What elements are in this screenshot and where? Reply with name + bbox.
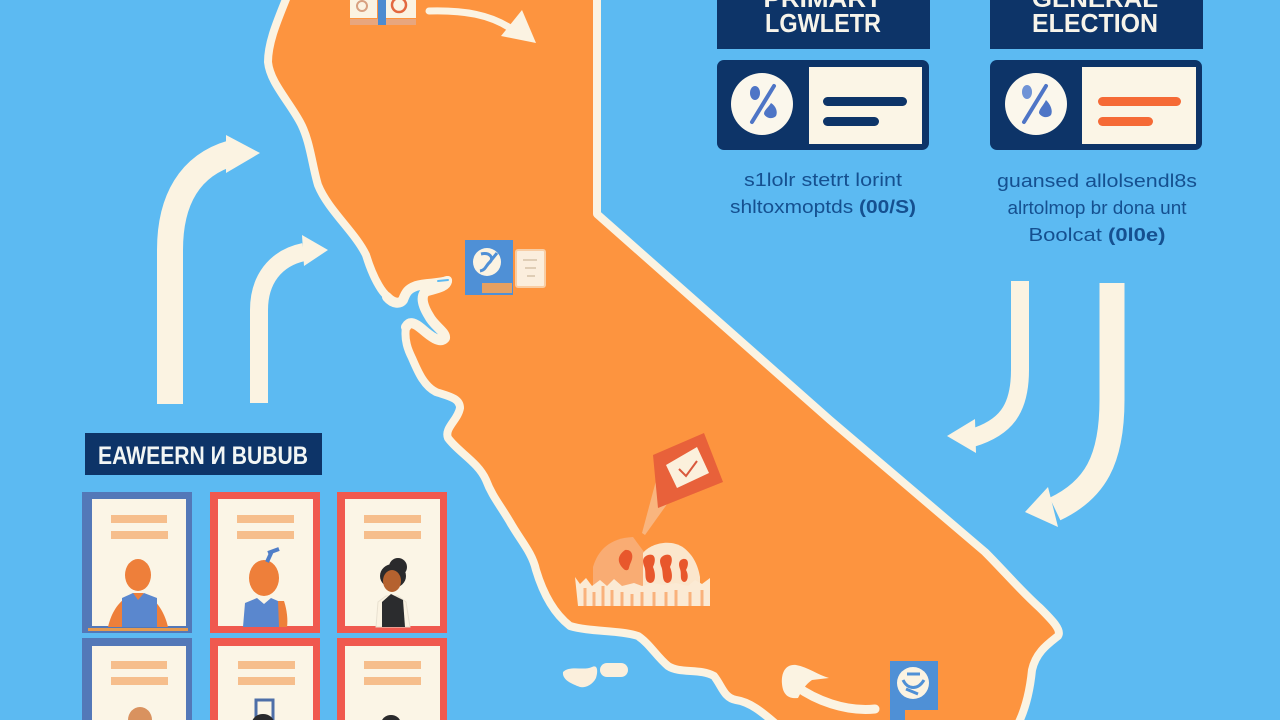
- icon: southern globe badge: [890, 661, 938, 720]
- panel: primary election column: [717, 0, 930, 217]
- arrow: southern map: [782, 665, 875, 709]
- arrow: large left up: [170, 135, 260, 404]
- card: red frame top middle: [210, 492, 320, 633]
- card: primary stats: [717, 60, 929, 150]
- arrow: right small down-left: [947, 281, 1020, 453]
- text: general description: [997, 171, 1197, 245]
- text: general description: guansed allolsendl8s: [997, 171, 1197, 191]
- arrow: top map: [429, 10, 536, 43]
- icon: percent mark general: [1022, 85, 1052, 122]
- panel: candidates heading: [85, 433, 322, 475]
- icon: percent mark primary: [750, 86, 777, 122]
- icon: map badge and dome: [575, 433, 723, 606]
- islands: channel islands: [563, 663, 628, 687]
- card: red frame top right: [337, 492, 447, 633]
- text: general description: alrtolmop br dona unt: [1008, 198, 1186, 218]
- heading: general election: ELECTION: [1032, 8, 1158, 38]
- heading: primary: [717, 0, 930, 49]
- icon: top map pair: [350, 0, 416, 25]
- map: California state: [268, 0, 1059, 720]
- panel: candidate cards: [82, 492, 447, 720]
- text: primary description: [730, 170, 916, 217]
- heading: general election: [990, 0, 1203, 49]
- panel: candidates heading: EAWEERN И BUBUB: [98, 442, 308, 470]
- text: primary description: shltoxmoptds (00/S): [730, 197, 916, 217]
- icon: bay area globe and note: [465, 240, 545, 295]
- card: blue frame bottom left: [82, 638, 192, 720]
- arrow: right large down-left: [1025, 283, 1112, 527]
- text: primary description: s1lolr stetrt lorint: [744, 170, 902, 190]
- card: red frame bottom middle: [210, 638, 320, 720]
- text: general description: Boolcat (0l0e): [1028, 225, 1166, 245]
- panel: general election column: [990, 0, 1203, 245]
- arrow: small left up: [259, 235, 328, 403]
- card: red frame bottom right: [337, 638, 447, 720]
- card: general stats: [990, 60, 1202, 150]
- card: blue frame top left: [82, 492, 192, 633]
- heading: primary: LGWLETR: [765, 8, 881, 38]
